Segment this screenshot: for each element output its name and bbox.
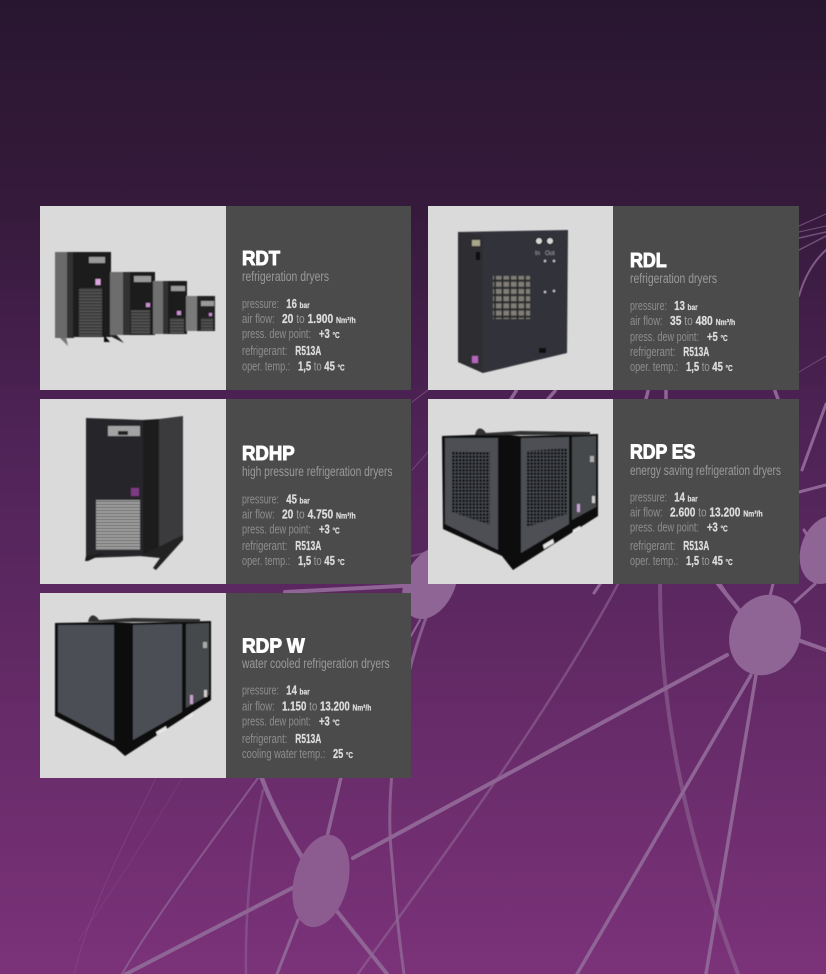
specifications: +3 °C (319, 327, 340, 341)
network node: right edge (791, 509, 826, 591)
specifications: 20 to 1.900 Nm³/h (282, 312, 356, 326)
panel: RDL (428, 206, 799, 390)
specifications: 1,5 to 45 °C (298, 554, 345, 568)
product image: RDL dryer (458, 230, 568, 373)
specifications: press. dew point: (242, 522, 311, 536)
specifications (630, 490, 763, 568)
specifications: +5 °C (707, 330, 728, 344)
product image: RDP ES dryer (442, 428, 598, 570)
specifications: 2.600 to 13.200 Nm³/h (670, 506, 763, 520)
specifications: air flow: (242, 700, 275, 714)
specifications: +3 °C (319, 522, 340, 536)
product image: four RDT dryers (55, 252, 215, 346)
specifications: air flow: (242, 312, 275, 326)
subtitle: refrigeration dryers (630, 271, 717, 286)
specifications: press. dew point: (242, 714, 311, 728)
specifications: pressure: (630, 299, 667, 313)
specifications: press. dew point: (630, 330, 699, 344)
specifications: R513A (683, 539, 709, 553)
heading: RDP ES: RDP ES (630, 442, 695, 464)
specifications: 14 bar (674, 490, 698, 504)
specifications: pressure: (630, 490, 667, 504)
specifications: 45 bar (286, 492, 310, 506)
specifications: 14 bar (286, 684, 310, 698)
specifications (242, 492, 356, 568)
specifications (242, 297, 356, 374)
subtitle: refrigeration dryers (242, 269, 329, 284)
specifications: refrigerant: (630, 345, 675, 359)
specifications: air flow: (630, 506, 663, 520)
specifications: 1,5 to 45 °C (298, 360, 345, 374)
panel: RDP ES (428, 399, 799, 584)
specifications: 1,5 to 45 °C (686, 554, 733, 568)
network node: lower left (283, 829, 359, 933)
network node: lower right (717, 584, 813, 686)
specifications: R513A (683, 345, 709, 359)
specifications: refrigerant: (242, 732, 287, 746)
specifications: oper. temp.: (242, 360, 290, 374)
specifications: refrigerant: (242, 539, 287, 553)
specifications: R513A (295, 344, 321, 358)
network node: centre (391, 538, 469, 628)
product image: RDL dryer: Out (545, 251, 555, 257)
specifications: pressure: (242, 684, 279, 698)
specifications (242, 684, 371, 761)
product image: RDP W dryer (55, 615, 211, 756)
specifications: pressure: (242, 492, 279, 506)
heading: RDHP: RDHP (242, 443, 295, 465)
specifications: 1,5 to 45 °C (686, 360, 733, 374)
specifications: +3 °C (319, 714, 340, 728)
heading: RDT: RDT (242, 248, 280, 270)
specifications: oper. temp.: (242, 554, 290, 568)
specifications: 1.150 to 13.200 Nm³/h (282, 700, 371, 714)
specifications: R513A (295, 732, 321, 746)
specifications (630, 299, 735, 374)
specifications: oper. temp.: (630, 554, 678, 568)
specifications: 16 bar (286, 297, 310, 311)
specifications: air flow: (242, 508, 275, 522)
specifications: refrigerant: (630, 539, 675, 553)
specifications: oper. temp.: (630, 360, 678, 374)
subtitle: water cooled refrigeration dryers (241, 656, 390, 671)
specifications: refrigerant: (242, 344, 287, 358)
specifications: 20 to 4.750 Nm³/h (282, 508, 356, 522)
panel: RDP W (40, 593, 411, 778)
panel: RDT (40, 206, 411, 390)
subtitle: high pressure refrigeration dryers (242, 464, 393, 479)
specifications: pressure: (242, 297, 279, 311)
background network of nodes and lines (74, 214, 826, 974)
specifications: 25 °C (333, 747, 353, 761)
product image: RDL dryer: In (535, 251, 540, 257)
subtitle: energy saving refrigeration dryers (630, 463, 781, 478)
specifications: air flow: (630, 314, 663, 328)
specifications: 13 bar (674, 299, 698, 313)
product image: RDHP dryer (85, 416, 183, 570)
specifications: 35 to 480 Nm³/h (670, 314, 735, 328)
specifications: +3 °C (707, 520, 728, 534)
panel: RDHP (40, 399, 411, 584)
heading: RDL: RDL (630, 250, 667, 272)
specifications: cooling water temp.: (242, 747, 325, 761)
heading: RDP W: RDP W (242, 636, 305, 658)
specifications: press. dew point: (242, 327, 311, 341)
specifications: press. dew point: (630, 520, 699, 534)
specifications: R513A (295, 539, 321, 553)
